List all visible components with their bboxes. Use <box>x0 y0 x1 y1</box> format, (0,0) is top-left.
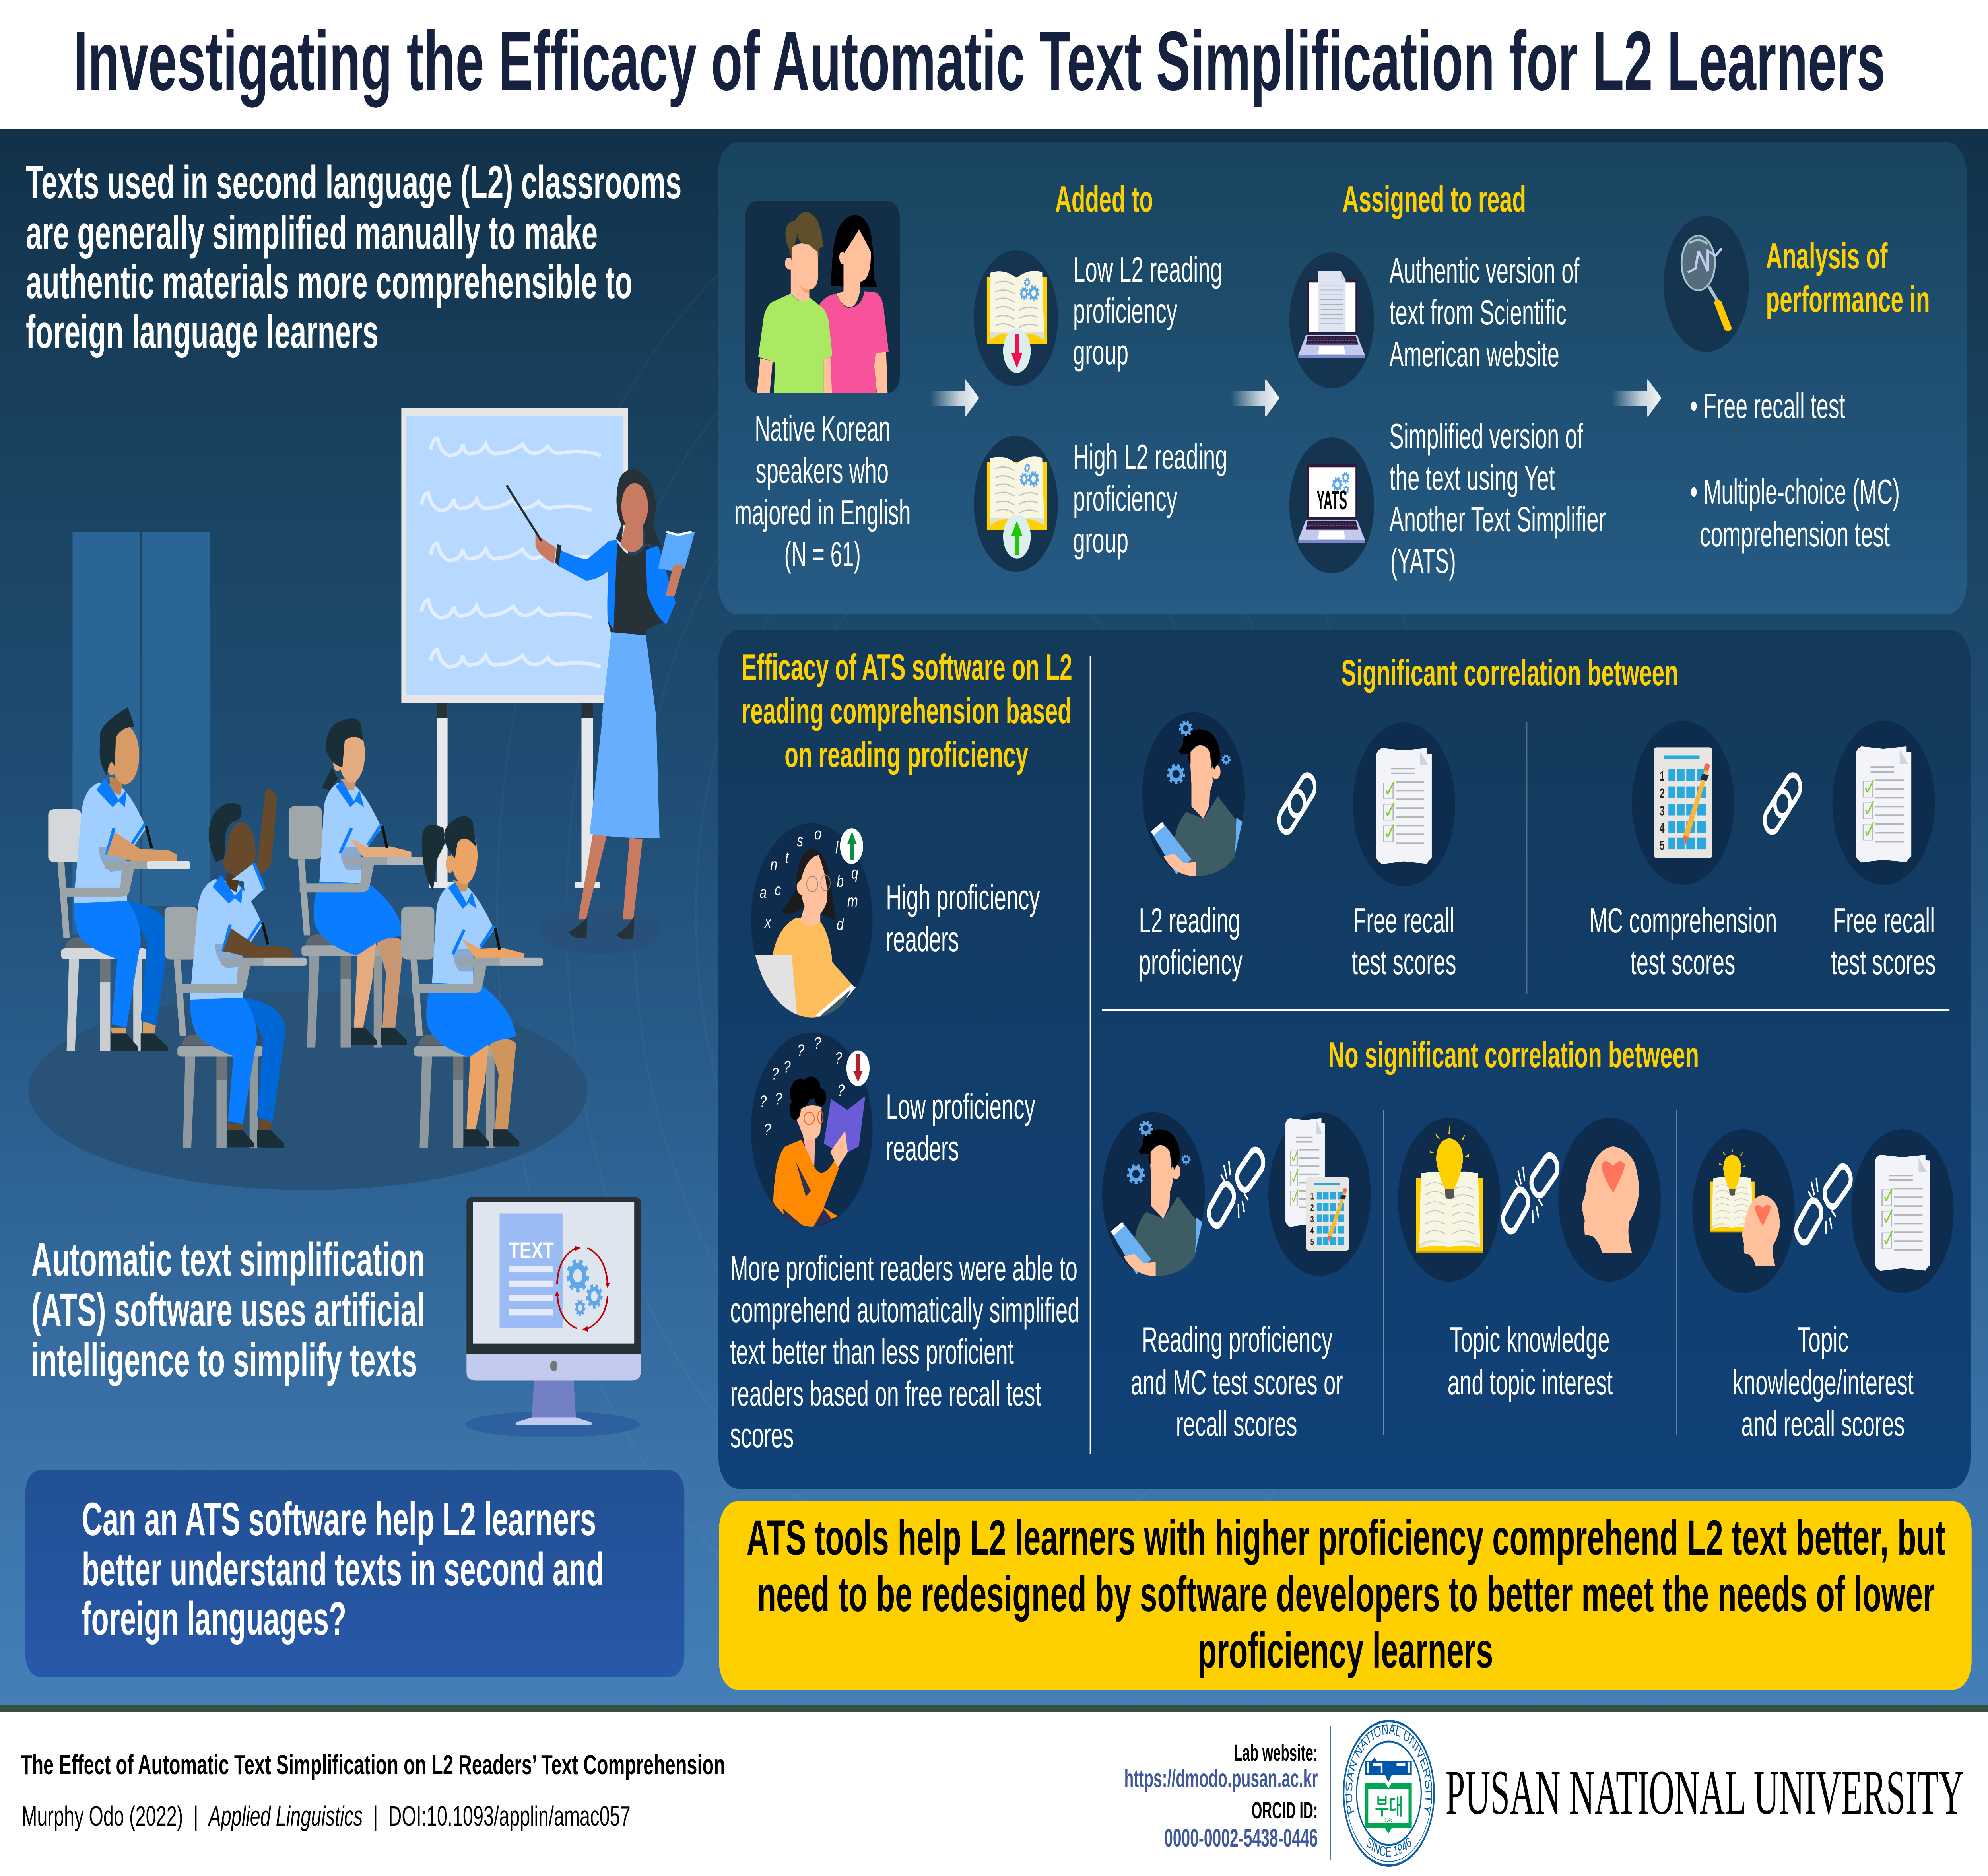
icon: head with heart <box>1558 1118 1661 1282</box>
icon: high proficiency reader: o <box>814 824 821 843</box>
intro text block <box>26 156 681 358</box>
authentic text label <box>1389 251 1580 374</box>
high proficiency group label: proficiency <box>1073 479 1177 518</box>
arrow two <box>1231 379 1279 417</box>
participants label: speakers who <box>756 451 889 490</box>
intro text block: authentic materials more comprehensible to <box>26 256 633 308</box>
L2 reading label <box>1139 901 1242 982</box>
icon: checklist three <box>1851 1129 1954 1293</box>
topic knowledge label: and topic interest <box>1448 1363 1613 1402</box>
icon: MC sheet <box>1632 721 1734 885</box>
icon: high proficiency reader: c <box>775 880 781 899</box>
free recall label two <box>1831 901 1936 982</box>
free recall label: Free recall <box>1353 901 1454 940</box>
heading: no significant correlation: No significant correlation between <box>1328 1035 1699 1075</box>
icon: low proficiency reader: ? <box>784 1058 791 1076</box>
icon: high proficiency reader: t <box>785 848 789 866</box>
authentic text label: text from Scientific <box>1389 293 1567 332</box>
icon: link one <box>1276 770 1318 837</box>
icon: high proficiency reader: q <box>851 863 858 882</box>
low proficiency group label <box>1073 250 1222 372</box>
conclusion callout <box>719 1501 1972 1690</box>
ATS text block: intelligence to simplify texts <box>31 1334 417 1386</box>
L2 reading label: L2 reading <box>1139 901 1240 940</box>
icon: book high proficiency <box>974 436 1058 572</box>
question box: foreign languages? <box>82 1592 346 1645</box>
intro text block: foreign language learners <box>26 305 379 358</box>
icon: broken link two <box>1501 1151 1560 1235</box>
university name: PUSAN NATIONAL UNIVERSITY <box>1446 1757 1964 1827</box>
intro text block: are generally simplified manually to make <box>26 206 598 259</box>
topic interest recall label: and recall scores <box>1741 1404 1905 1443</box>
icon: low proficiency reader: ? <box>759 1092 767 1111</box>
free recall label: test scores <box>1352 943 1456 982</box>
icon: two participants <box>745 201 900 393</box>
icon: checklist two <box>1833 721 1935 885</box>
icon: low proficiency reader <box>751 1033 873 1227</box>
panel: findings <box>718 630 1971 1489</box>
heading: assigned to read: Assigned to read <box>1342 179 1526 219</box>
question box <box>25 1470 684 1677</box>
heading: added to: Added to <box>1055 179 1153 219</box>
citation <box>21 1750 725 1832</box>
icon: high proficiency reader <box>751 823 873 1018</box>
icon: high proficiency reader: b <box>837 872 844 890</box>
finding text block <box>730 1249 1080 1455</box>
authentic text label: Authentic version of <box>1389 251 1580 290</box>
lab and ORCID links: 0000-0002-5438-0446 <box>1164 1824 1318 1852</box>
lab and ORCID links: ORCID ID: <box>1252 1798 1318 1824</box>
citation: Murphy Odo (2022) | Applied Linguistics | DOI:10.1093/applin/amac057 <box>21 1801 631 1832</box>
heading: efficacy: Efficacy of ATS software on L2 <box>742 647 1072 687</box>
low proficiency label: Low proficiency <box>886 1087 1035 1126</box>
topic knowledge label: Topic knowledge <box>1450 1320 1610 1359</box>
university seal: 부대 <box>1375 1796 1403 1818</box>
finding text block: text better than less proficient <box>730 1332 1014 1371</box>
arrow one <box>930 379 979 417</box>
participants label: majored in English <box>734 493 911 532</box>
footer band <box>0 1705 1988 1876</box>
icon: high proficiency reader: a <box>759 883 767 901</box>
panel: study design <box>718 142 1967 614</box>
floor shadow <box>28 991 588 1190</box>
heading: significant correlation: Significant correlation between <box>1341 653 1678 693</box>
icon: magnifier with chart <box>1664 216 1749 352</box>
icon: low proficiency reader: ? <box>775 1089 782 1108</box>
ATS text block <box>31 1233 425 1386</box>
reading proficiency label: Reading proficiency <box>1142 1320 1332 1359</box>
simplified text label: Another Text Simplifier <box>1389 500 1606 539</box>
conclusion callout: need to be redesigned by software developers to better meet the needs of lower <box>757 1567 1935 1622</box>
free recall label <box>1352 901 1456 982</box>
high proficiency label: readers <box>886 920 959 959</box>
icon: broken link one <box>1206 1146 1266 1230</box>
low proficiency group label: proficiency <box>1073 291 1177 330</box>
university seal: 1946 <box>1384 1817 1392 1823</box>
icon: book with bulb <box>1398 1118 1501 1282</box>
topic knowledge label <box>1448 1320 1613 1402</box>
heading: analysis of performance: Analysis of <box>1766 236 1888 276</box>
icon: high proficiency reader: n <box>770 855 777 874</box>
low proficiency label: readers <box>886 1129 959 1168</box>
question box: Can an ATS software help L2 learners <box>82 1493 596 1545</box>
title: Investigating the Efficacy of Automatic Text Simplification for L2 Learners <box>74 15 1885 108</box>
icon: laptop with document <box>1289 252 1374 388</box>
topic interest recall label: knowledge/interest <box>1733 1363 1914 1402</box>
heading: efficacy <box>742 647 1072 775</box>
lockers <box>72 532 210 934</box>
icon: link two <box>1762 770 1804 837</box>
test list <box>1690 386 1900 554</box>
topic interest recall label: Topic <box>1798 1320 1848 1359</box>
low proficiency group label: Low L2 reading <box>1073 250 1222 289</box>
icon: high proficiency reader: x <box>764 913 772 931</box>
university seal <box>1343 1721 1435 1866</box>
finding text block: comprehend automatically simplified <box>730 1291 1080 1330</box>
icon: laptop with YATS: YATS <box>1316 486 1347 516</box>
MC comprehension label: MC comprehension <box>1590 901 1777 940</box>
icon: checklist one <box>1353 722 1455 886</box>
icon: low proficiency reader: ? <box>837 1081 845 1100</box>
icon: monitor with text and gears <box>465 1197 641 1437</box>
icon: high proficiency reader: l <box>835 838 839 857</box>
question box: better understand texts in second and <box>82 1543 604 1595</box>
simplified text label: the text using Yet <box>1389 458 1555 497</box>
icon: reader with gears two <box>1102 1112 1205 1276</box>
student one <box>48 707 190 1051</box>
authentic text label: American website <box>1389 335 1559 374</box>
participants label: (N = 61) <box>784 535 861 574</box>
university seal: PUSAN NATIONAL UNIVERSITY <box>1343 1721 1435 1816</box>
free recall label two: test scores <box>1831 943 1936 982</box>
icon: laptop with YATS <box>1289 437 1374 573</box>
simplified text label: (YATS) <box>1390 542 1456 581</box>
university seal: SINCE 1946 <box>1365 1834 1413 1860</box>
L2 reading label: proficiency <box>1139 943 1242 982</box>
reading proficiency label <box>1131 1320 1343 1443</box>
finding text block: readers based on free recall test <box>730 1374 1041 1413</box>
icon: broken link three <box>1794 1162 1853 1247</box>
icon: low proficiency reader: ? <box>797 1041 804 1060</box>
participants label: Native Korean <box>755 409 891 448</box>
conclusion callout: ATS tools help L2 learners with higher proficiency comprehend L2 text better, but <box>747 1510 1945 1566</box>
icon: monitor with text and gears: TEXT <box>509 1237 554 1263</box>
finding text block: More proficient readers were able to <box>730 1249 1077 1288</box>
high proficiency group label <box>1073 437 1227 560</box>
high proficiency label: High proficiency <box>886 878 1040 917</box>
test list: comprehension test <box>1700 515 1890 554</box>
icon: low proficiency reader: ? <box>764 1120 771 1139</box>
low proficiency group label: group <box>1073 333 1128 372</box>
icon: low proficiency reader: ? <box>814 1033 821 1052</box>
icon: high proficiency reader: s <box>797 831 803 850</box>
whiteboard <box>401 408 628 888</box>
arrow three <box>1612 379 1662 417</box>
reading proficiency label: recall scores <box>1176 1404 1297 1443</box>
finding text block: scores <box>730 1416 794 1455</box>
test list: • Multiple-choice (MC) <box>1690 472 1900 511</box>
citation: The Effect of Automatic Text Simplification on L2 Readers’ Text Comprehension <box>21 1750 725 1781</box>
MC comprehension label: test scores <box>1631 943 1735 982</box>
heading: analysis of performance: performance in <box>1766 279 1930 320</box>
heading: analysis of performance <box>1766 236 1930 320</box>
icon: book low proficiency <box>974 250 1058 386</box>
icon: reader with gears <box>1142 712 1245 876</box>
classroom illustration <box>28 408 695 1190</box>
MC comprehension label <box>1590 901 1777 982</box>
high proficiency group label: High L2 reading <box>1073 437 1227 476</box>
high proficiency group label: group <box>1073 521 1128 560</box>
simplified text label: Simplified version of <box>1389 417 1583 456</box>
ATS text block: Automatic text simplification <box>31 1233 425 1286</box>
icon: high proficiency reader: m <box>847 891 858 910</box>
heading: efficacy: on reading proficiency <box>784 734 1028 775</box>
participants label <box>734 409 911 574</box>
simplified text label <box>1389 417 1606 581</box>
lab and ORCID links <box>1124 1740 1318 1852</box>
topic interest recall label <box>1733 1320 1914 1443</box>
free recall label two: Free recall <box>1833 901 1935 940</box>
teacher <box>507 469 695 954</box>
icon: low proficiency reader: ? <box>835 1049 842 1067</box>
icon: book bulb and head <box>1692 1129 1795 1293</box>
student four <box>401 816 543 1148</box>
conclusion callout: proficiency learners <box>1198 1623 1493 1679</box>
student three <box>289 718 430 1048</box>
ATS text block: (ATS) software uses artificial <box>31 1284 425 1336</box>
icon: low proficiency reader: ? <box>772 1064 779 1083</box>
icon: high proficiency reader: d <box>837 915 844 933</box>
icon: checklist and MC sheet <box>1268 1112 1371 1276</box>
lab and ORCID links: Lab website: <box>1234 1740 1318 1766</box>
intro text block: Texts used in second language (L2) classrooms <box>26 156 681 208</box>
lab and ORCID links: https://dmodo.pusan.ac.kr <box>1124 1765 1318 1792</box>
low proficiency label <box>886 1087 1035 1168</box>
student two <box>165 789 307 1148</box>
test list: • Free recall test <box>1690 386 1845 425</box>
reading proficiency label: and MC test scores or <box>1131 1363 1343 1402</box>
high proficiency label <box>886 878 1040 959</box>
heading: efficacy: reading comprehension based <box>742 691 1072 731</box>
header band <box>0 0 1988 129</box>
